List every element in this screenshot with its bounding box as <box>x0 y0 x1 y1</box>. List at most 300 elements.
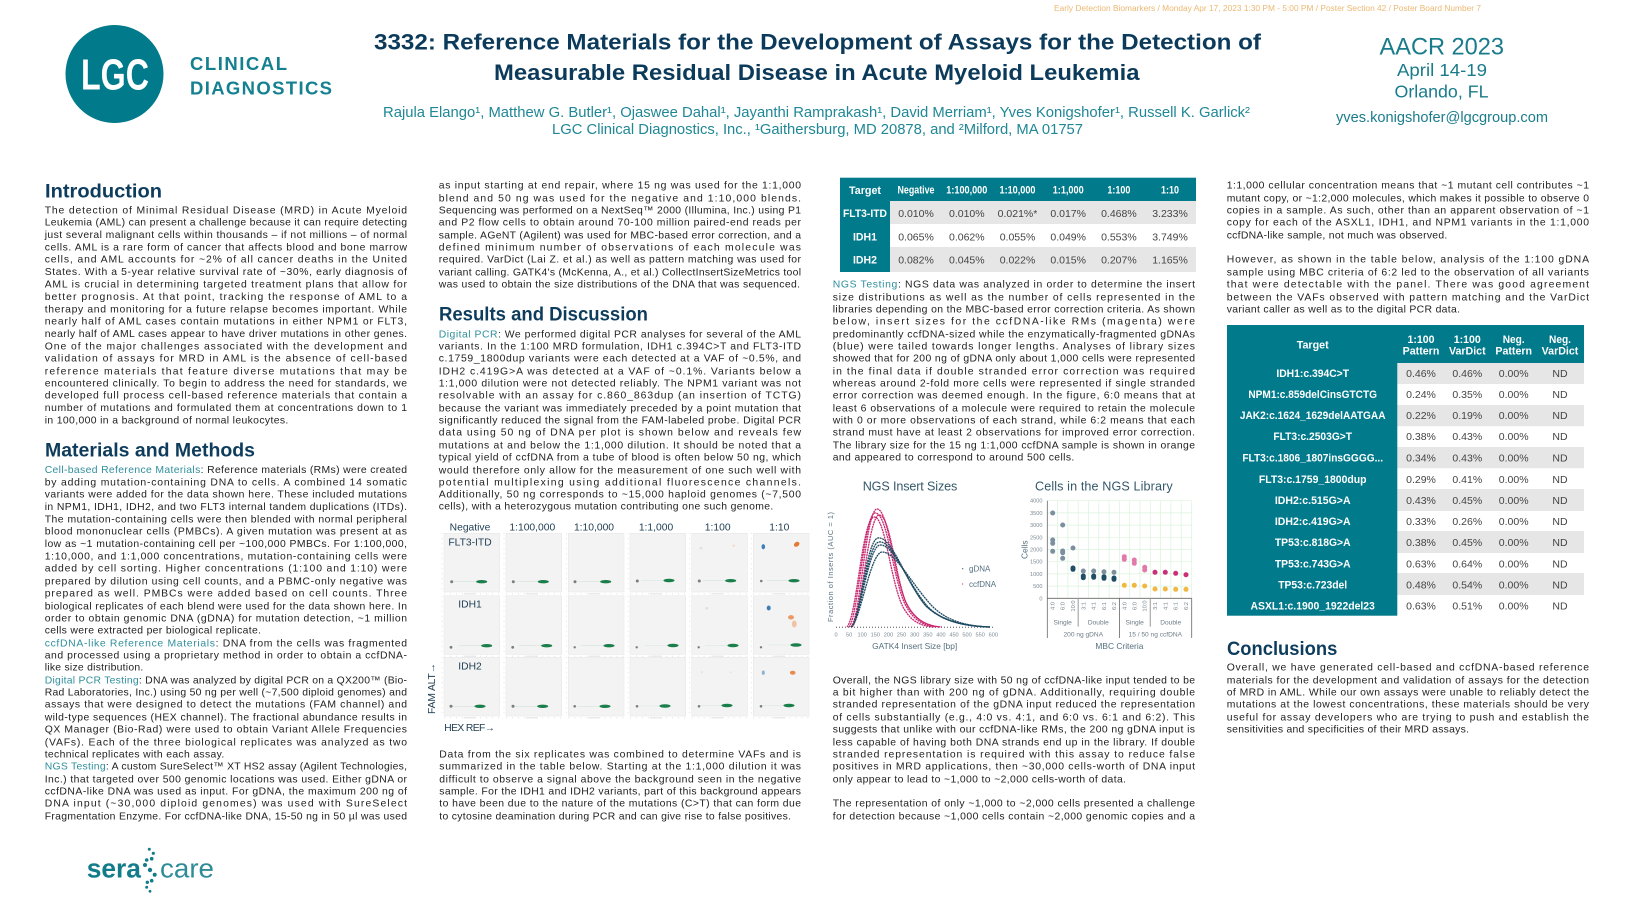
text block: detection at low concentrations: copies in a sample. As such, other than an apparent observation of ~1 <box>1227 205 1589 216</box>
text block: materials and methods: variants were added for the data shown here. These included mutations <box>45 489 407 500</box>
SeraCare logo: sera <box>87 853 142 883</box>
y tick labels: 0 <box>1039 596 1042 602</box>
y tick labels: 2000 <box>1030 548 1042 554</box>
row: TP53:c.723del: TP53:c.723del <box>1278 579 1347 591</box>
row: TP53:c.743G>A: 0.63% <box>1406 558 1436 570</box>
authors and affiliations: LGC Clinical Diagnostics, Inc., ¹Gaithersburg, MD 20878, and ²Milford, MA 01757 <box>552 122 1083 138</box>
row: IDH2 <box>853 255 1188 267</box>
text block: NGS testing: size distributions as well as the number of cells represented in the <box>833 292 1195 303</box>
row: TP53:c.743G>A: ND <box>1552 558 1568 570</box>
category labels: 4:0 <box>1122 602 1128 610</box>
row: IDH2: 1.165% <box>1152 255 1188 267</box>
text block: introduction: developed full process cell-based reference materials that contain a <box>45 390 407 401</box>
y tick labels: 2500 <box>1030 535 1042 541</box>
text block: digital PCR results: typical yield of ccfDNA from a tube of blood is often below 50 ng, which <box>439 452 801 463</box>
row: TP53:c.723del: 0.48% <box>1406 579 1436 591</box>
text block: digital PCR results: data using 50 ng of DNA per plot is shown below and reveals few <box>439 427 801 438</box>
grid <box>1047 501 1192 598</box>
text block: materials and methods: Fragmentation Enzyme. For ccfDNA-like DNA, 15-50 ng in 50 µl was used <box>45 811 407 822</box>
legend: ccfDNA <box>969 580 997 589</box>
text block: methods continued: variant calling. GATK4's (McKenna, A., et al.) CollectInsertSizeMetrics tool <box>439 267 801 278</box>
row: IDH2: IDH2 <box>853 255 877 267</box>
row: TP53:c.818G>A: 0.38% <box>1406 537 1436 549</box>
table header: 1:10,000 <box>1000 184 1036 196</box>
text block: conclusions: useful for assay developers who are trying to push and establish the <box>1227 712 1589 723</box>
row: FLT3:c.1759_1800dup: 0.41% <box>1452 474 1482 486</box>
x tick labels: 50 <box>846 632 852 638</box>
table header: VarDict <box>1542 346 1579 358</box>
LGC Clinical Diagnostics logo <box>66 25 332 123</box>
text block: introduction: just several malignant cells within thousands – if not millions – of normal <box>44 230 407 241</box>
text block: NGS testing: NGS Testing: NGS data was analyzed in order to determine the insert <box>833 279 1195 290</box>
category labels: 6:0 <box>1132 602 1138 610</box>
row: TP53:c.818G>A: TP53:c.818G>A <box>1275 537 1351 549</box>
text block: methods continued: defined minimum number of observations of each molecule was <box>439 242 801 253</box>
text block: introduction: cells, and AML accounts for ~2% of all cancer deaths in the United <box>45 254 407 265</box>
y tick labels: 3000 <box>1030 523 1042 529</box>
row: ASXL1:c.1900_1922del23: 0.00% <box>1499 600 1529 612</box>
text block: methods continued: and P2 flow cells to obtain around 70-100 million paired-end reads per <box>439 217 802 228</box>
heading: Materials and Methods: Materials and Methods <box>45 440 255 462</box>
row: IDH1: IDH1 <box>853 231 877 243</box>
x tick labels: 100 <box>858 632 867 638</box>
heading: Results and Discussion: Results and Discussion <box>439 304 648 326</box>
text block: digital PCR results: significantly reduced the signal from the FAM-labeled probe. Digital PCR <box>439 415 801 426</box>
row: TP53:c.743G>A <box>1275 558 1568 570</box>
row: ASXL1:c.1900_1922del23: 0.63% <box>1406 600 1436 612</box>
text block: introduction: Leukemia (AML) can present a challenge because it can require detecting <box>45 217 407 228</box>
text block: digital PCR results: Digital PCR: We performed digital PCR analyses for several of the AML <box>439 329 801 340</box>
row: IDH2: 0.207% <box>1101 255 1137 267</box>
row labels: IDH2 <box>458 661 482 672</box>
text block: introduction: States. With a 5-year relative survival rate of ~30%, early diagnosis of <box>45 267 407 278</box>
row: IDH2: 0.082% <box>898 255 934 267</box>
row: IDH1: 0.065% <box>898 231 934 243</box>
text block: detection at low concentrations: that were detectable with the panel. There was good agreement <box>1227 279 1589 290</box>
text block: overall NGS findings: The representation of only ~1,000 to ~2,000 cells presented a challenge <box>833 798 1195 809</box>
x tick labels: 600 <box>989 632 998 638</box>
y tick labels <box>1030 499 1042 602</box>
title: 3332: Reference Materials for the Development of Assays for the Detection of <box>374 29 1262 54</box>
row: FLT3:c.1806_1807insGGGG... <box>1242 452 1568 464</box>
text block: overall NGS findings: stranded representation is required with this assay to reduce false <box>833 749 1195 760</box>
row: JAK2:c.1624_1629delAATGAA: 0.00% <box>1499 410 1529 422</box>
group labels: Single <box>1054 619 1072 626</box>
text block: NGS testing: strand must have at least 2 observations for improved error correction. <box>833 427 1195 438</box>
row: NPM1:c.859delCinsGTCTG <box>1248 389 1568 401</box>
200 ng gDNA single-strand points <box>1050 510 1116 575</box>
text block: materials and methods: in NPM1, IDH1, IDH2, and two FLT3 internal tandem duplications (ITDs). <box>45 502 407 513</box>
text block: materials and methods: assays that were designed to detect the mutations (FAM channel) and <box>45 699 407 710</box>
row: ASXL1:c.1900_1922del23 <box>1251 600 1568 612</box>
text block: VAF summary <box>439 749 801 822</box>
table header: Pattern <box>1495 346 1532 358</box>
category labels: 6:1 <box>1174 602 1180 610</box>
group labels: Double <box>1088 619 1109 626</box>
row: FLT3:c.2503G>T <box>1273 431 1568 443</box>
column headers: 1:1,000 <box>639 522 673 533</box>
text block: overall NGS findings: of cells substantially (e.g., 4:0 vs. 4:1, and 6:0 vs. 6:1 and 6:2). This <box>833 712 1195 723</box>
grey negative droplet clusters <box>450 580 763 708</box>
row: TP53:c.818G>A: 0.00% <box>1499 537 1529 549</box>
category labels: 10:0 <box>1071 600 1077 612</box>
text block: materials and methods: prepared by dilution using cell counts, and a PBMC-only negative was <box>45 576 407 587</box>
row: FLT3:c.1806_1807insGGGG...: FLT3:c.1806_1807insGGGG... <box>1242 452 1383 464</box>
table header: VarDict <box>1449 346 1486 358</box>
row: FLT3-ITD: 0.021%* <box>998 208 1037 220</box>
text block: introduction: in 100,000 in a background of normal leukocytes. <box>45 415 288 426</box>
text block: detection at low concentrations: mutant copy, or ~1:2,000 molecules, which makes it possible to observe 0 <box>1227 193 1589 204</box>
text block: overall NGS findings: positives in MRD applications, then ~30,000 cells-worth of DNA input <box>833 761 1195 772</box>
row: IDH1:c.394C>T: ND <box>1552 368 1568 380</box>
text block: methods continued: Sequencing was performed on a NextSeq™ 2000 (Illumina, Inc.) using P1 <box>439 205 801 216</box>
row: IDH1: 0.062% <box>949 231 985 243</box>
text block: introduction: nearly half of AML cases appear to have driver mutations in other genes. <box>45 329 407 340</box>
text block: VAF summary: Data from the six replicates was combined to determine VAFs and is <box>439 749 801 760</box>
text block: methods continued: as input starting at end repair, where 15 ng was used for the 1:1,000 <box>439 180 801 191</box>
x axis title: MBC Criteria <box>1095 641 1144 651</box>
row: JAK2:c.1624_1629delAATGAA <box>1240 410 1568 422</box>
text block: materials and methods: ccfDNA-like Reference Materials: DNA from the cells was fragmented <box>45 638 407 649</box>
table header: 1:100 <box>1454 334 1481 346</box>
row: IDH2:c.419G>A: 0.00% <box>1499 516 1529 528</box>
row: IDH1:c.394C>T <box>1276 368 1568 380</box>
text block: digital PCR results: 1:1,000 dilution were not detected reliably. The NPM1 variant was not <box>439 378 801 389</box>
table header <box>849 184 1179 197</box>
table: digital PCR VAFs <box>840 178 1196 272</box>
conference info <box>1336 33 1548 126</box>
text block: detection at low concentrations: 1:1,000 cellular concentration means that ~1 mutant cell contributes ~1 <box>1227 180 1589 191</box>
row: FLT3-ITD: 0.010% <box>949 208 985 220</box>
table: NGS variant VAFs <box>1227 325 1584 616</box>
row: IDH2:c.515G>A: 0.43% <box>1406 495 1436 507</box>
text block: introduction: The detection of Minimal Residual Disease (MRD) in Acute Myeloid <box>45 205 407 216</box>
row: ASXL1:c.1900_1922del23: 0.51% <box>1452 600 1482 612</box>
text block: introduction: One of the major challenges associated with the development and <box>45 341 407 352</box>
text block: materials and methods: QX Manager (Bio-Rad) were used to obtain Variant Allele Frequencies <box>45 724 407 735</box>
y tick labels: 4000 <box>1030 499 1042 505</box>
table header: 1:10 <box>1161 184 1179 196</box>
200 ng gDNA double-strand points <box>1070 566 1116 582</box>
row: FLT3-ITD: 0.017% <box>1050 208 1086 220</box>
row: FLT3:c.2503G>T: 0.43% <box>1452 431 1482 443</box>
text block: conclusions: mutations at the lowest concentrations, these materials should be very <box>1227 699 1590 710</box>
text block: NGS testing: libraries depending on the MBC-based error correction criteria. As shown <box>833 304 1195 315</box>
category labels: 3:1 <box>1153 602 1159 610</box>
gDNA curves <box>851 538 990 627</box>
row: FLT3:c.1759_1800dup: FLT3:c.1759_1800dup <box>1259 474 1367 486</box>
text block: digital PCR results: potential multiplexing using additional fluorescence channels. <box>439 477 801 488</box>
text block: materials and methods: Rad Laboratories, Inc.) using 50 ng per well (~7,500 diploid genomes) and <box>45 687 407 698</box>
row: IDH2:c.515G>A: IDH2:c.515G>A <box>1275 495 1351 507</box>
axis label: HEX REF: HEX REF→ <box>444 723 495 734</box>
row: IDH2:c.419G>A: ND <box>1552 516 1568 528</box>
y tick labels: 500 <box>1033 584 1042 590</box>
x tick labels <box>834 632 998 638</box>
title <box>374 29 1262 85</box>
row: IDH1:c.394C>T: 0.00% <box>1499 368 1529 380</box>
row: IDH2:c.419G>A: 0.33% <box>1406 516 1436 528</box>
text block: materials and methods: The mutation-containing cells were then blended with normal peripheral <box>45 514 407 525</box>
row: NPM1:c.859delCinsGTCTG: 0.00% <box>1499 389 1529 401</box>
conference info: yves.konigshofer@lgcgroup.com <box>1336 109 1548 126</box>
text block: materials and methods: Inc.) that targeted over 500 genomic locations was used. Either gDNA or <box>45 774 408 785</box>
SeraCare logo <box>87 848 214 893</box>
text block: NGS testing: The library size for the 15 ng 1:1,000 ccfDNA sample is shown in orange <box>833 440 1195 451</box>
authors and affiliations: Rajula Elango¹, Matthew G. Butler¹, Ojaswee Dahal¹, Jayanthi Ramprakash¹, David Merriam¹, Yves Konigshofer¹, Russell K. Garlick² <box>383 105 1250 121</box>
text block: introduction: better prognosis. At that point, tracking the response of AML to a <box>45 292 407 303</box>
table header: Neg. <box>1549 334 1571 346</box>
text block: digital PCR results: because the variant was immediately preceded by a point mutation that <box>439 403 801 414</box>
row: ASXL1:c.1900_1922del23: ND <box>1552 600 1568 612</box>
row: FLT3:c.2503G>T: FLT3:c.2503G>T <box>1273 431 1352 443</box>
text block: conclusions: of MRD in AML. While our own assays were unable to reliably detect the <box>1227 687 1589 698</box>
row: TP53:c.818G>A <box>1275 537 1568 549</box>
row: FLT3-ITD: 0.010% <box>898 208 934 220</box>
row: TP53:c.723del <box>1278 579 1568 591</box>
y axis label: Fraction of Inserts (AUC = 1) <box>826 512 835 622</box>
ccfDNA points <box>1122 554 1147 572</box>
text block: overall NGS findings: less capable of having both DNA strands end up in the library. If double <box>833 737 1195 748</box>
row labels: IDH1 <box>458 599 482 610</box>
row: TP53:c.743G>A: TP53:c.743G>A <box>1275 558 1351 570</box>
text block: detection at low concentrations: However, as shown in the table below, analysis of the 1:100 gDNA <box>1227 254 1589 265</box>
text block: detection at low concentrations: between the VAFs observed with pattern matching and the VarDict <box>1227 292 1589 303</box>
row: FLT3-ITD: 3.233% <box>1152 208 1188 220</box>
row: TP53:c.818G>A: 0.45% <box>1452 537 1482 549</box>
legend <box>962 565 997 589</box>
table header: 1:100 <box>1408 334 1434 346</box>
text block: methods continued: was used to obtain the size distributions of the DNA that was sequenced. <box>438 279 800 290</box>
row: TP53:c.743G>A: 0.64% <box>1452 558 1482 570</box>
text block: digital PCR results <box>438 329 801 513</box>
row: TP53:c.743G>A: 0.00% <box>1499 558 1529 570</box>
x tick labels: 200 <box>884 632 893 638</box>
text block: digital PCR results: cells), with a heterozygous mutation contributing one such genome. <box>439 502 773 513</box>
text block: materials and methods: and processed using a proprietary method in order to obtain a ccfDNA- <box>45 650 407 661</box>
text block: NGS testing: in the final data if double stranded error correction was required <box>833 366 1195 377</box>
15 ng ccfDNA points <box>1122 583 1188 592</box>
chart: NGS insert sizes <box>826 480 998 651</box>
text block: conclusions: sensitivities and specificities of their MRD assays. <box>1227 724 1469 735</box>
group labels: 200 ng gDNA <box>1064 631 1104 638</box>
row: IDH2:c.515G>A: ND <box>1552 495 1568 507</box>
category labels <box>1051 600 1190 612</box>
row: IDH1: 3.749% <box>1152 231 1188 243</box>
group labels <box>1054 619 1183 638</box>
text block: materials and methods: DNA input (~30,000 diploid genomes) was used with SureSelect <box>45 798 407 809</box>
text block: overall NGS findings: stranded representation of the gDNA input reduced the representation <box>833 699 1195 710</box>
text block: methods continued: blend and 50 ng was used for the negative and 1:10,000 blends. <box>439 193 801 204</box>
row: FLT3:c.1759_1800dup: 0.00% <box>1499 474 1529 486</box>
text block: digital PCR results: Additionally, 50 ng corresponds to ~15,000 haploid genomes (~7,500 <box>439 489 801 500</box>
row: FLT3:c.1759_1800dup <box>1259 474 1568 486</box>
axis label: FAM ALT: FAM ALT→ <box>427 663 438 714</box>
row: IDH2:c.515G>A <box>1275 495 1568 507</box>
group labels: Single <box>1126 619 1144 626</box>
text block: conclusions: materials for the development and validation of assays for the detection <box>1227 675 1589 686</box>
row: NPM1:c.859delCinsGTCTG: 0.24% <box>1406 389 1436 401</box>
x tick labels: 450 <box>949 632 959 638</box>
table header: Target <box>849 185 881 197</box>
column headers: 1:100 <box>705 522 731 533</box>
text block: materials and methods: low as ~1 mutation-containing cell per ~100,000 PMBCs. For 1:100,000, <box>45 539 407 550</box>
text block: materials and methods: like size distribution. <box>45 662 143 673</box>
row: TP53:c.723del: 0.00% <box>1499 579 1529 591</box>
text block: materials and methods: biological replicates of each blend were used for the data shown here. In <box>45 601 407 612</box>
row: FLT3:c.2503G>T: ND <box>1552 431 1568 443</box>
row: FLT3:c.1759_1800dup: 0.29% <box>1406 474 1436 486</box>
text block: NGS testing: least 6 observations of a molecule were required to retain the molecule <box>833 403 1195 414</box>
text block: detection at low concentrations: ccfDNA-like sample, not much was observed. <box>1227 230 1447 241</box>
legend: gDNA <box>969 565 991 574</box>
text block: materials and methods: blood mononuclear cells (PMBCs). A given mutation was present at as <box>45 526 407 537</box>
row: JAK2:c.1624_1629delAATGAA: JAK2:c.1624_1629delAATGAA <box>1240 410 1386 422</box>
text block: materials and methods: NGS Testing: A custom SureSelect™ XT HS2 assay (Agilent Technologies, <box>45 761 407 772</box>
text block: detection at low concentrations: variant caller as well as to the digital PCR data. <box>1227 304 1460 315</box>
table header: 1:1,000 <box>1053 184 1084 196</box>
row labels <box>448 537 492 672</box>
text block: overall NGS findings: Overall, the NGS library size with 50 ng of ccfDNA-like input tended to be <box>833 675 1195 686</box>
text block: digital PCR results: IDH2 c.419G>A was detected at a VAF of ~0.1%. Variants below a <box>439 366 801 377</box>
text block: VAF summary: to have been due to the nature of the mutations (C>T) that can form due <box>439 798 801 809</box>
row: FLT3:c.2503G>T: 0.38% <box>1406 431 1436 443</box>
row: FLT3:c.2503G>T: 0.00% <box>1499 431 1529 443</box>
text block: materials and methods: added by cell sorting. Higher concentrations (1:100 and 1:10) were <box>45 563 407 574</box>
text block: introduction <box>44 205 408 426</box>
row: IDH2: 0.015% <box>1050 255 1086 267</box>
x tick labels: 250 <box>897 632 906 638</box>
axes <box>1047 501 1192 638</box>
category labels: 4:1 <box>1163 602 1169 610</box>
text block: NGS testing: below, insert sizes for the ccfDNA-like RMs (magenta) were <box>833 317 1195 328</box>
text block: introduction: validation of assays for MRD in AML is the absence of cell-based <box>45 353 407 364</box>
row: IDH2:c.515G>A: 0.45% <box>1452 495 1482 507</box>
text block: materials and methods: order to obtain genomic DNA (gDNA) for mutation detection, ~1 million <box>45 613 407 624</box>
table header: Pattern <box>1403 346 1439 358</box>
text block: digital PCR results: would therefore only allow for the measurement of one such well with <box>438 465 801 476</box>
y axis label: Cells <box>1020 540 1030 559</box>
text block: conclusions <box>1227 662 1590 735</box>
x axis title: GATK4 Insert Size [bp] <box>872 641 957 651</box>
row: TP53:c.723del: 0.54% <box>1452 579 1482 591</box>
row: FLT3:c.1806_1807insGGGG...: 0.00% <box>1499 452 1529 464</box>
row: FLT3-ITD: 0.468% <box>1101 208 1137 220</box>
y tick labels: 1000 <box>1030 572 1042 578</box>
text block: VAF summary: summarized in the table below. Starting at the 1:1,000 dilution it was <box>439 762 801 773</box>
text block: NGS testing: showed that for 200 ng of gDNA only about 1,000 cells were represented <box>833 354 1195 365</box>
text block: overall NGS findings: suggests that unlike with our ccfDNA-like RMs, the 200 ng gDNA input is <box>833 724 1195 735</box>
row: IDH1:c.394C>T: 0.46% <box>1406 368 1436 380</box>
text block: materials and methods: (VAFs). Each of the three biological replicates was analyzed as two <box>45 737 407 748</box>
row: IDH1: 0.553% <box>1101 231 1137 243</box>
text block: NGS testing: error correction was deemed enough. In the figure, 6:0 means that at <box>833 391 1195 402</box>
row: FLT3:c.1806_1807insGGGG...: 0.43% <box>1452 452 1482 464</box>
category labels: 10:0 <box>1143 600 1149 612</box>
text block: digital PCR results: resolvable with an assay for c.860_863dup (an insertion of TCTG) <box>439 390 801 401</box>
text block: NGS testing: (blue) were tailed towards longer lengths. Analyses of library sizes <box>833 342 1195 353</box>
text block: materials and methods: by adding mutation-containing DNA to cells. A combined 14 somatic <box>45 477 407 488</box>
table header: Neg. <box>1503 334 1525 346</box>
text block: materials and methods: ccfDNA-like DNA was used as input. For gDNA, the maximum 200 ng of <box>45 786 407 797</box>
text block: introduction: cells. AML is a rare form of cancer that affects blood and bone marrow <box>45 242 407 253</box>
column headers: Negative <box>450 522 491 533</box>
row: NPM1:c.859delCinsGTCTG: NPM1:c.859delCinsGTCTG <box>1248 389 1377 401</box>
text block: materials and methods: 1:10,000, and 1:1,000 concentrations, mutation-containing cells were <box>45 551 407 562</box>
row: JAK2:c.1624_1629delAATGAA: 0.19% <box>1452 410 1482 422</box>
conference info: AACR 2023 <box>1380 33 1504 60</box>
ccfDNA curves <box>847 509 942 627</box>
text block: overall NGS findings: for detection because ~1,000 cells contain ~2,000 genomic copies and a <box>833 811 1195 822</box>
x tick labels: 500 <box>962 632 972 638</box>
row: FLT3-ITD: FLT3-ITD <box>843 208 887 220</box>
text block: methods continued: required. VarDict (Lai Z. et al.) as well as pattern matching was used for <box>439 254 802 265</box>
column headers <box>450 522 790 533</box>
authors and affiliations <box>383 105 1250 138</box>
text block: introduction: AML is crucial in determining targeted treatment plans that allow for <box>45 279 408 290</box>
category labels: 3:1 <box>1081 602 1087 610</box>
group labels: 15 / 50 ng ccfDNA <box>1129 631 1183 638</box>
table header <box>1297 334 1579 358</box>
row: FLT3-ITD <box>843 208 1188 220</box>
text block: NGS testing <box>832 279 1195 463</box>
text block: conclusions: Overall, we have generated cell-based and ccfDNA-based reference <box>1227 662 1589 673</box>
text block: overall NGS findings <box>833 675 1195 822</box>
text block: digital PCR results: c.1759_1800dup variants were each detected at a VAF of ~0.5%, and <box>439 353 801 364</box>
text block: VAF summary: sample. For the IDH1 and IDH2 variants, part of this background appears <box>439 786 801 797</box>
text block: introduction: encountered clinically. To begin to address the need for standards, we <box>45 378 407 389</box>
row: ASXL1:c.1900_1922del23: ASXL1:c.1900_1922del23 <box>1251 600 1375 612</box>
text block: introduction: nearly half of AML cases contain mutations in either NPM1 or FLT3, <box>45 316 407 327</box>
column headers: 1:100,000 <box>509 522 555 533</box>
row: IDH2:c.419G>A: 0.26% <box>1452 516 1482 528</box>
x tick labels: 350 <box>923 632 932 638</box>
mutant droplet clusters <box>700 541 800 675</box>
x tick labels: 150 <box>871 632 880 638</box>
text block: overall NGS findings: a bit higher than with 200 ng of gDNA. Additionally, requiring double <box>833 687 1195 698</box>
chart title: NGS Insert Sizes <box>863 480 957 494</box>
text block: NGS testing: and appeared to correspond to around 500 cells. <box>833 452 1074 463</box>
LGC Clinical Diagnostics logo: LGC <box>81 50 149 99</box>
text block: NGS testing: predominantly ccfDNA-sized while the enzymatically-fragmented gDNAs <box>833 329 1195 340</box>
row: IDH2:c.419G>A: IDH2:c.419G>A <box>1275 516 1351 528</box>
chart: cells in the NGS library <box>1020 480 1192 651</box>
row: IDH2:c.515G>A: 0.00% <box>1499 495 1529 507</box>
column headers: 1:10,000 <box>574 522 614 533</box>
row: IDH1: 0.055% <box>1000 231 1035 243</box>
table header: 1:100 <box>1107 184 1130 196</box>
table header: Target <box>1297 340 1329 352</box>
SeraCare logo: care <box>160 853 214 883</box>
conference info: Orlando, FL <box>1394 81 1489 101</box>
x tick labels: 0 <box>834 632 838 638</box>
text block: NGS testing: whereas around 2-fold more cells were represented if single stranded <box>832 378 1195 389</box>
row: IDH2:c.419G>A <box>1275 516 1568 528</box>
chart: digital PCR dot plots <box>427 522 809 734</box>
conference session line: Early Detection Biomarkers / Monday Apr 17, 2023 1:30 PM - 5:00 PM / Poster Section 42 / Poster Board Number 7 <box>1054 4 1481 13</box>
row: IDH2: 0.045% <box>949 255 985 267</box>
category labels: 6:1 <box>1102 602 1108 610</box>
category labels: 6:0 <box>1061 602 1067 610</box>
ccfDNA double-strand points <box>1152 570 1188 577</box>
LGC Clinical Diagnostics logo: DIAGNOSTICS <box>190 77 332 98</box>
text block: materials and methods: Cell-based Reference Materials: Reference materials (RMs) were created <box>45 465 407 476</box>
row: TP53:c.723del: ND <box>1552 579 1568 591</box>
row: JAK2:c.1624_1629delAATGAA: ND <box>1552 410 1568 422</box>
row: IDH1 <box>853 231 1188 243</box>
text block: materials and methods: wild-type sequences (HEX channel). The fractional abundance results in <box>44 712 407 723</box>
row: IDH2: 0.022% <box>1000 255 1035 267</box>
